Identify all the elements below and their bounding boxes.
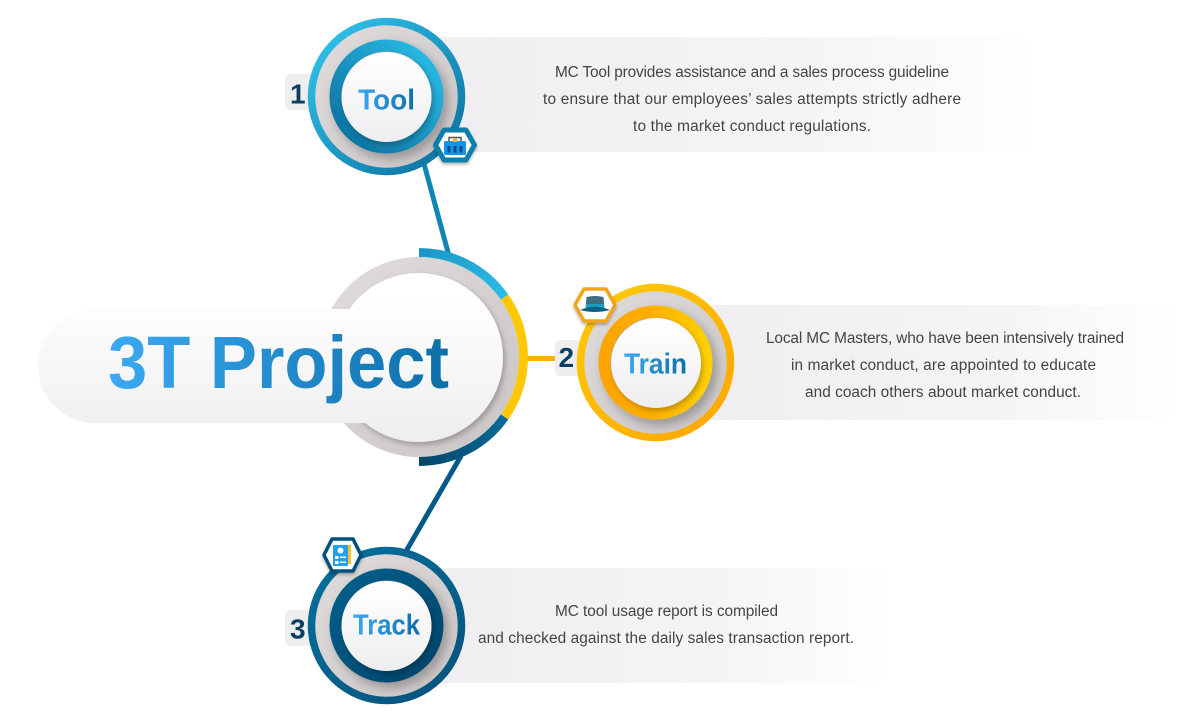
- text: Train description: [766, 330, 1124, 401]
- number tab 2: [555, 340, 587, 376]
- hub grey disc: [319, 257, 519, 457]
- icon: report hexagon: [324, 539, 361, 571]
- number tab 3: 3: [290, 614, 306, 644]
- hub white disc: [334, 273, 503, 442]
- text: Train description: Local MC Masters, who have been intensively trained: [766, 330, 1124, 347]
- panel: Track description background: [440, 568, 888, 683]
- text: Tool description: [543, 64, 961, 135]
- hub arc: yellow: [505, 297, 523, 417]
- text: Tool description: MC Tool provides assistance and a sales process guideline: [555, 64, 949, 81]
- text: Train description: and coach others about market conduct.: [805, 384, 1081, 401]
- hub arc: navy: [419, 417, 505, 462]
- node: Train: Train: [624, 348, 687, 380]
- node: Tool: Tool: [358, 84, 415, 116]
- node: Tool: [312, 22, 462, 172]
- number tab 3: [285, 610, 317, 646]
- connector: Track to hub: [405, 456, 461, 553]
- icon: hat hexagon: [575, 289, 615, 321]
- title: 3T Project: [108, 321, 449, 404]
- text: Track description: MC tool usage report is compiled: [555, 603, 778, 620]
- title pill: [38, 309, 400, 423]
- icon: toolbox hexagon: [436, 130, 474, 160]
- panel: Tool description background: [440, 37, 1035, 152]
- panel: Train description background: [712, 305, 1177, 420]
- number tab 1: [285, 74, 317, 110]
- text: Train description: in market conduct, are appointed to educate: [791, 357, 1096, 374]
- text: Tool description: to the market conduct regulations.: [633, 118, 871, 135]
- connector: Tool to hub: [423, 160, 449, 256]
- text: Track description: and checked against the daily sales transaction report.: [478, 630, 854, 647]
- text: Track description: [478, 603, 854, 647]
- number tab 1: 1: [290, 78, 306, 110]
- node: Track: Track: [353, 610, 421, 642]
- node: Track: [312, 550, 462, 700]
- central hub: 3T Project: [38, 252, 523, 462]
- text: Tool description: to ensure that our employees’ sales attempts strictly adhere: [543, 91, 961, 108]
- connector: Train to hub: [526, 356, 558, 361]
- hub arc: blue: [419, 252, 505, 297]
- node: Train: [580, 288, 730, 438]
- number tab 2: 2: [558, 342, 574, 373]
